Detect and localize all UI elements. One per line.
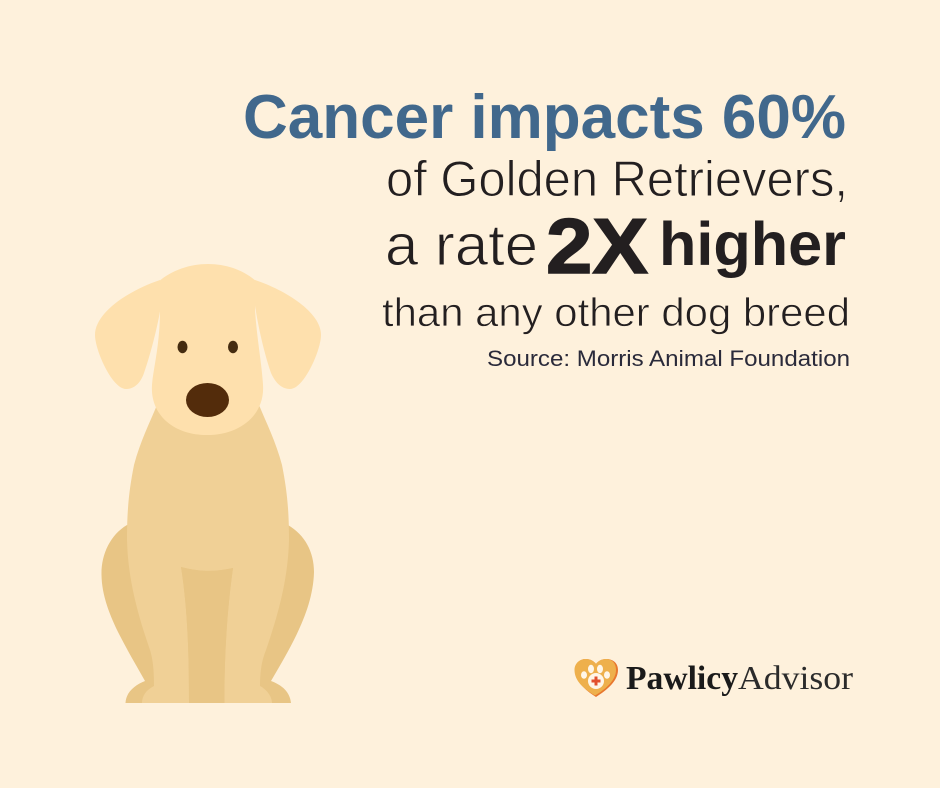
headline text: higher: higher xyxy=(659,210,846,278)
dog left ear xyxy=(95,280,161,389)
headline line: than any other dog breed: than any other dog breed xyxy=(382,291,850,335)
dog right ear xyxy=(255,280,321,389)
headline xyxy=(243,83,850,335)
logo wordmark: Advisor: Advisor xyxy=(738,660,854,697)
dog right eye xyxy=(228,341,238,353)
headline line: of Golden Retrievers: of Golden Retrievers, xyxy=(386,151,848,207)
source note: Source: Morris Animal Foundation xyxy=(487,346,850,371)
logo wordmark: Pawlicy: Pawlicy xyxy=(626,660,738,697)
dog left eye xyxy=(178,341,188,353)
icon: heart shadow xyxy=(575,659,618,697)
dog body and front legs xyxy=(127,405,289,703)
headline text: a rate: a rate xyxy=(385,213,538,278)
icon: paw toes and pad xyxy=(581,665,610,689)
icon: heart xyxy=(574,659,616,696)
dog nose xyxy=(186,383,229,417)
dog back haunches and paws xyxy=(101,525,314,703)
logo: Pawlicy Advisor xyxy=(574,659,854,697)
icon: sitting dog illustration xyxy=(95,264,321,703)
dog head xyxy=(152,264,263,435)
headline line: Cancer impacts 60%: Cancer impacts 60% xyxy=(243,83,846,152)
headline figure: 2X: 2X xyxy=(546,202,648,290)
dog chest gap between legs xyxy=(181,567,233,703)
icon: medical cross xyxy=(592,676,600,686)
